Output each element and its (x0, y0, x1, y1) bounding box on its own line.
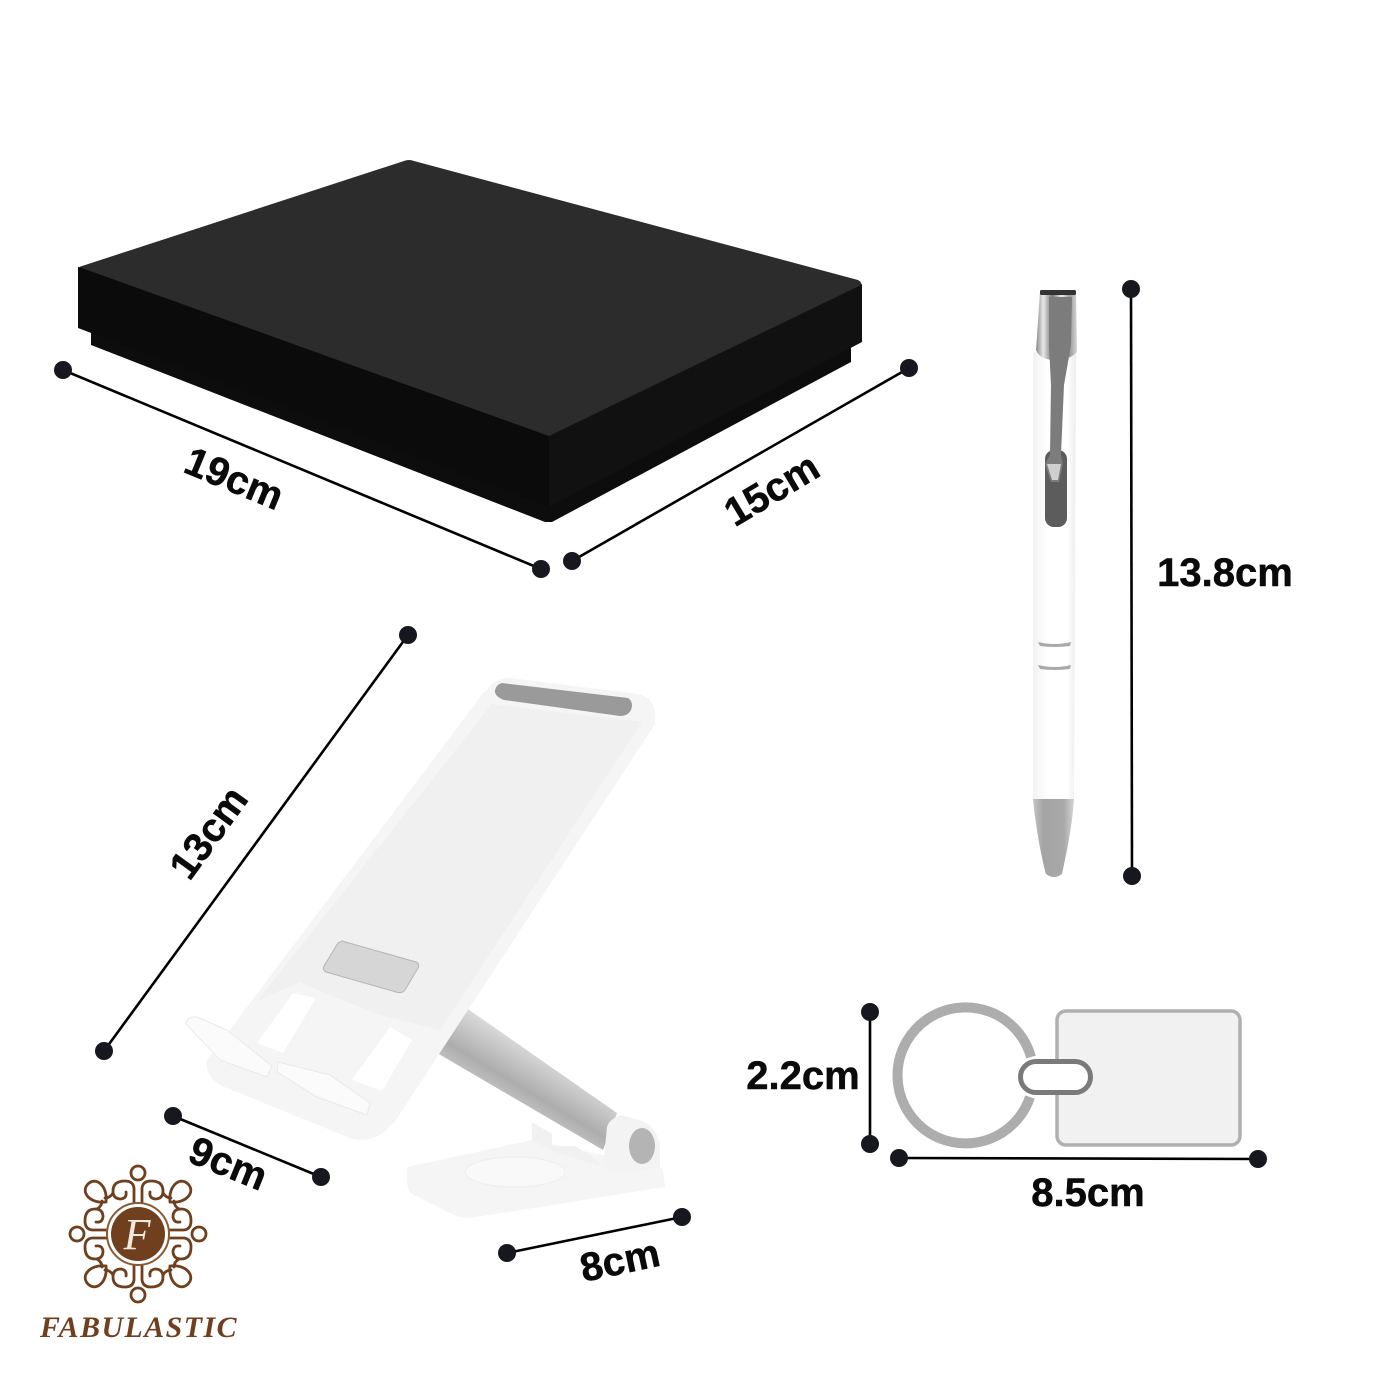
stand badge (323, 941, 419, 993)
dimension: stand height: 13cm (161, 779, 257, 887)
pen nib (1033, 799, 1074, 877)
stand right hook (277, 1062, 370, 1115)
dimension: pen length (1122, 280, 1293, 885)
stand base pad (465, 1157, 565, 1187)
panel: gift box (78, 160, 862, 522)
stand base (407, 1140, 665, 1218)
logo wordmark: FABULASTIC (39, 1311, 238, 1344)
pen body (1033, 352, 1076, 800)
panel: keychain (898, 1007, 1240, 1145)
pen clip head (1047, 464, 1061, 480)
stand hinge (603, 1115, 660, 1175)
dimension: box width (563, 359, 918, 570)
logo emblem: F (123, 1210, 152, 1259)
dimension: stand width (164, 1107, 330, 1199)
dimension: box length (54, 361, 550, 578)
key link (1020, 1062, 1090, 1092)
stand right window (352, 1027, 412, 1091)
pen clip (1045, 297, 1072, 482)
stand top strip (495, 683, 632, 716)
dimension: keychain width: 8.5cm (1031, 1171, 1145, 1215)
dimension: box width: 15cm (717, 445, 827, 535)
box base (91, 330, 851, 522)
logo emblem (70, 1166, 206, 1302)
dimension: stand base (498, 1208, 691, 1291)
pen top band (1040, 290, 1076, 295)
panel: pen (1033, 290, 1077, 877)
stand plate (207, 678, 655, 1140)
pen cap (1036, 292, 1077, 360)
pen slot (1045, 450, 1067, 527)
dimension: pen length: 13.8cm (1157, 551, 1293, 595)
stand left window (257, 993, 316, 1053)
stand hinge cap (629, 1128, 655, 1164)
stand left hook (186, 1017, 272, 1077)
box lid side right (549, 284, 862, 507)
box lid side left (78, 267, 549, 507)
logo: Fabulastic (39, 1166, 238, 1344)
dimension: box length: 19cm (178, 439, 290, 519)
key tag (1057, 1011, 1240, 1145)
dimension: stand base: 8cm (576, 1231, 664, 1291)
dimension: keychain height: 2.2cm (746, 1054, 860, 1098)
stand plate texture (258, 704, 642, 1030)
pen rings (1038, 642, 1071, 670)
key ring (898, 1007, 1031, 1143)
panel: phone stand (186, 678, 665, 1218)
dimension: stand width: 9cm (183, 1129, 273, 1199)
stand hinge bracket (532, 1122, 603, 1167)
dimension: keychain height (746, 1003, 879, 1153)
dimension: keychain width (890, 1149, 1267, 1215)
box lid top (79, 160, 861, 436)
dimension: stand height (95, 626, 417, 1060)
stand arm (437, 1007, 617, 1150)
